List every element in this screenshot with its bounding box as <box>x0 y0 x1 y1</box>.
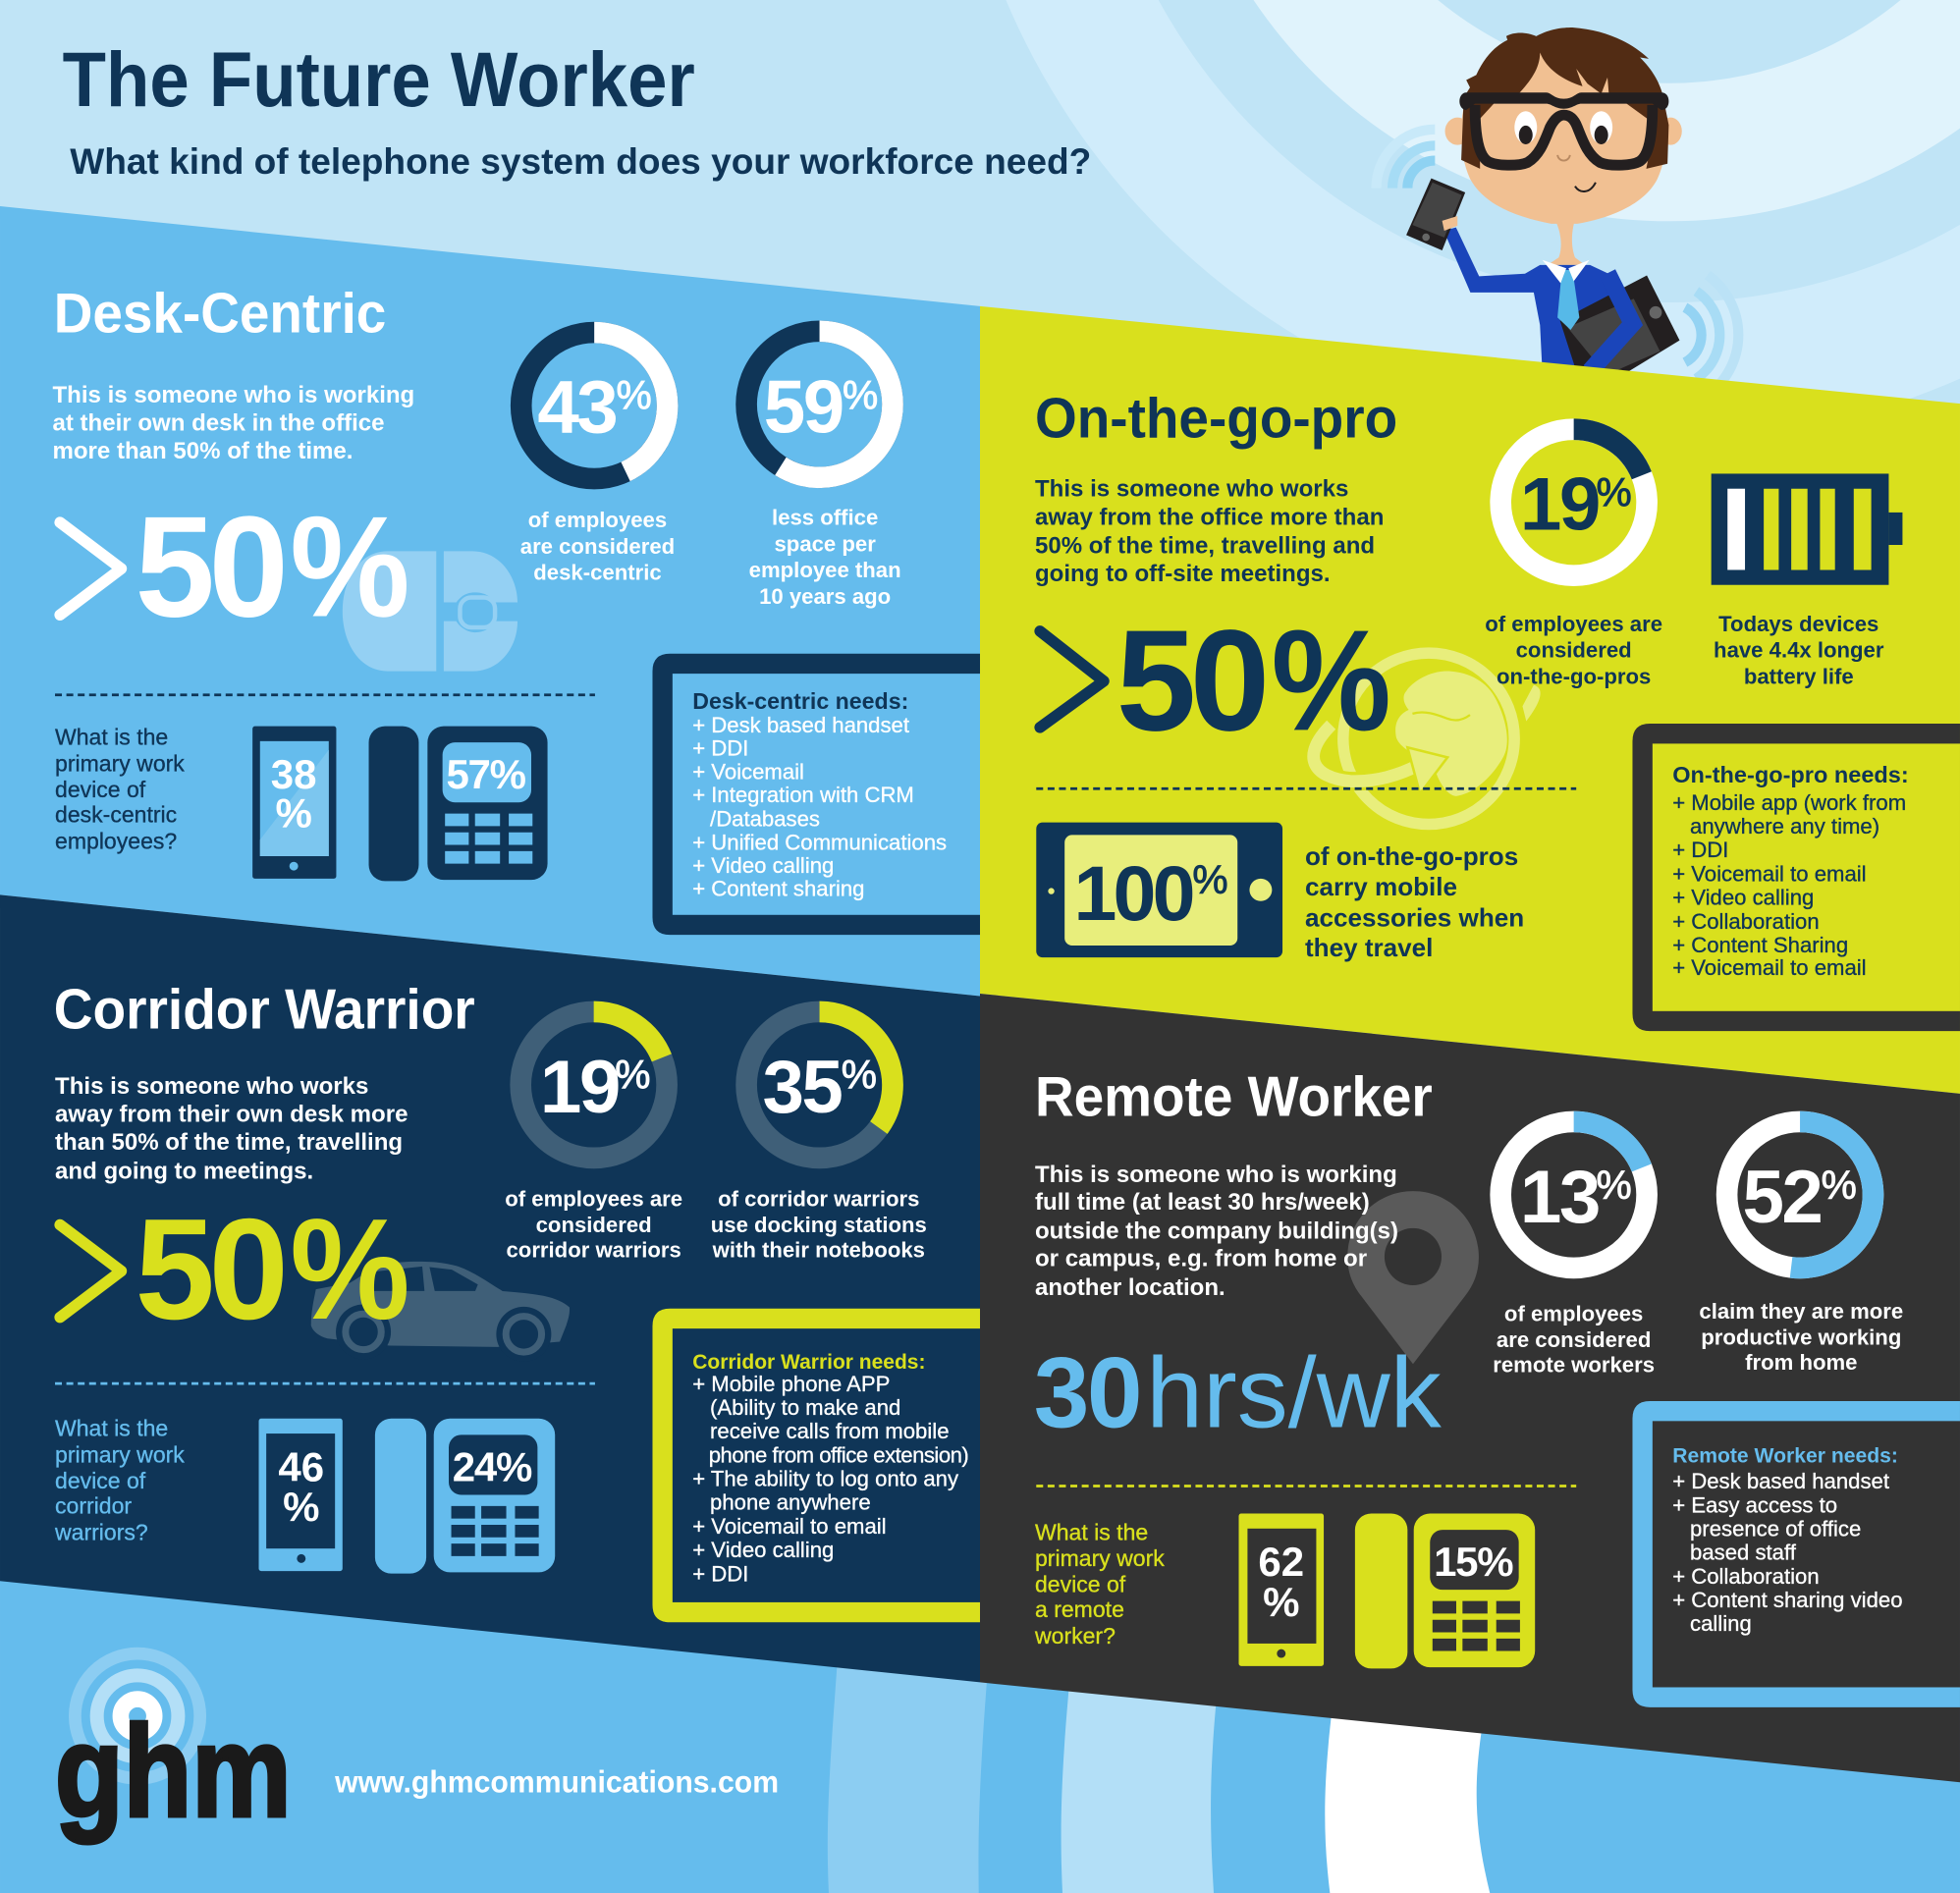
donut: 59 percent <box>746 331 893 477</box>
question: primary work <box>55 750 185 776</box>
question: desk-centric <box>55 802 177 828</box>
heading: Corridor Warrior <box>54 979 475 1042</box>
donut: 43 percent: % <box>617 372 652 417</box>
caption: of employees <box>1504 1302 1643 1326</box>
donut: 13 percent: % <box>1597 1163 1632 1208</box>
caption: are considered <box>520 534 675 559</box>
donut: 35 percent: 35 <box>763 1046 842 1129</box>
icon: landscape mobile 100 percent: 100 <box>1073 850 1193 937</box>
question: device of <box>55 1468 146 1493</box>
needs box: + Video calling <box>1672 886 1814 910</box>
heading: On-the-go-pro <box>1035 388 1397 451</box>
icon: desk phone 15 percent: 15% <box>1434 1539 1513 1585</box>
donut: 52 percent: % <box>1822 1163 1857 1208</box>
needs box: + Desk based handset <box>1672 1469 1889 1493</box>
question: employees? <box>55 828 177 853</box>
question: primary work <box>55 1441 185 1467</box>
large stat: over 50 percent: % <box>290 487 410 648</box>
donut: 13 percent <box>1500 1121 1647 1268</box>
panel: desk-centric <box>0 206 980 997</box>
description: another location. <box>1035 1274 1225 1301</box>
question: worker? <box>1034 1623 1116 1649</box>
caption: desk-centric <box>533 561 662 585</box>
character: future worker illustration <box>1377 27 1738 395</box>
caption: employee than <box>749 558 901 582</box>
description: full time (at least 30 hrs/week) <box>1035 1189 1370 1216</box>
icon: mobile 46 percent: % <box>283 1484 319 1530</box>
description: 50% of the time, travelling and <box>1035 532 1375 559</box>
donut: 19 percent: 19 <box>1520 463 1599 547</box>
large stat: over 50 percent <box>60 1189 410 1350</box>
icon: computer mouse <box>343 551 517 672</box>
donut: 19 percent: 19 <box>540 1046 619 1129</box>
needs box: presence of office <box>1690 1516 1861 1541</box>
needs box: On-the-go-pro needs: <box>1672 762 1909 787</box>
icon: car <box>311 1262 570 1362</box>
donut: 19 percent <box>1500 429 1647 575</box>
heading: Remote Worker <box>1035 1066 1433 1129</box>
description: and going to meetings. <box>55 1158 313 1184</box>
caption: of employees <box>528 508 667 532</box>
needs box: + DDI <box>1672 838 1728 862</box>
needs box: + Mobile app (work from <box>1672 790 1906 815</box>
caption: claim they are more <box>1699 1299 1903 1324</box>
donut: 19 percent: % <box>1597 470 1632 515</box>
needs box <box>1632 724 1960 1031</box>
question: What is the <box>1035 1519 1148 1544</box>
icon: desk phone 57 percent: 57% <box>446 751 526 797</box>
panel: corridor warrior <box>0 894 980 1682</box>
needs box: /Databases <box>710 806 820 831</box>
question: device of <box>55 777 146 802</box>
donut: 43 percent: 43 <box>537 365 616 449</box>
question: warriors? <box>54 1519 148 1544</box>
icon: desk phone 57 percent <box>369 727 548 881</box>
question: device of <box>1035 1572 1126 1597</box>
description: more than 50% of the time. <box>52 438 353 464</box>
donut: 52 percent: 52 <box>1742 1156 1821 1239</box>
question: corridor <box>55 1493 132 1519</box>
logo: ghm: ghm <box>55 1700 292 1845</box>
icon: desk phone 15 percent <box>1355 1514 1535 1668</box>
caption: of employees are <box>1485 612 1662 636</box>
needs box: + Unified Communications <box>692 831 947 855</box>
caption: Todays devices <box>1718 612 1878 636</box>
needs box: + Collaboration <box>1672 909 1820 934</box>
needs box: + Desk based handset <box>692 713 909 737</box>
needs box: receive calls from mobile <box>710 1419 949 1443</box>
needs box: + Content Sharing <box>1672 933 1848 957</box>
needs box: + DDI <box>692 1561 748 1586</box>
needs box: + Voicemail to email <box>692 1514 887 1539</box>
needs box: (Ability to make and <box>710 1395 900 1420</box>
needs box: + Video calling <box>692 1538 834 1562</box>
description: away from the office more than <box>1035 505 1384 531</box>
caption: space per <box>774 531 876 556</box>
needs box: Remote Worker needs: <box>1672 1444 1898 1467</box>
large stat: over 50 percent: 50 <box>135 1189 284 1350</box>
icon: mobile 46 percent: 46 <box>278 1443 324 1489</box>
icon: desk phone 24 percent: 24% <box>453 1443 532 1489</box>
large stat: 30 hrs per week: hrs/wk <box>1146 1337 1443 1449</box>
description: This is someone who works <box>55 1073 368 1100</box>
subtitle: What kind of telephone system does your workforce need? <box>70 141 1091 182</box>
caption: 10 years ago <box>759 584 891 609</box>
title: The Future Worker <box>63 36 695 123</box>
donut: 59 percent: 59 <box>764 365 843 449</box>
icon: mobile 62 percent: % <box>1263 1579 1299 1625</box>
needs box: + Video calling <box>692 853 834 878</box>
icon: mobile 62 percent: 62 <box>1258 1539 1304 1585</box>
needs box: anywhere any time) <box>1690 814 1879 838</box>
needs box: calling <box>1690 1611 1752 1636</box>
needs box <box>1632 1401 1960 1707</box>
icon: landscape mobile 100 percent: % <box>1192 857 1228 902</box>
needs box: + Voicemail to email <box>1672 955 1867 980</box>
needs box: phone anywhere <box>710 1490 871 1515</box>
needs box: Corridor Warrior needs: <box>692 1351 925 1374</box>
donut: 59 percent: % <box>843 372 878 417</box>
description: going to off-site meetings. <box>1035 561 1331 587</box>
caption: battery life <box>1744 664 1854 688</box>
description: outside the company building(s) <box>1035 1217 1398 1244</box>
caption: are considered <box>1497 1327 1651 1352</box>
question: What is the <box>55 1416 168 1441</box>
caption: carry mobile <box>1305 872 1457 901</box>
icon: mobile 38 percent: % <box>275 790 312 837</box>
needs box: + DDI <box>692 735 748 760</box>
caption: they travel <box>1305 933 1433 962</box>
icon: battery <box>1712 473 1902 585</box>
question: What is the <box>55 725 168 750</box>
caption: considered <box>1516 638 1632 663</box>
large stat: 30 hrs per week: 30 <box>1034 1337 1140 1449</box>
caption: productive working <box>1701 1325 1901 1350</box>
donut: 19 percent <box>520 1011 667 1158</box>
needs box: + Voicemail to email <box>1672 861 1867 886</box>
icon: globe <box>1314 653 1541 825</box>
icon: mobile 62 percent <box>1238 1514 1324 1666</box>
caption: on-the-go-pros <box>1497 664 1651 688</box>
heading: Desk-Centric <box>54 283 386 346</box>
needs box: + Content sharing <box>692 877 865 901</box>
large stat: over 50 percent: 50 <box>1116 600 1265 761</box>
description: This is someone who is working <box>52 382 414 408</box>
logo: ghm <box>55 1653 292 1845</box>
question: a remote <box>1035 1596 1124 1622</box>
needs box <box>652 654 980 935</box>
icon: desk phone 24 percent <box>375 1419 555 1574</box>
description: or campus, e.g. from home or <box>1035 1245 1367 1271</box>
caption: from home <box>1745 1350 1857 1375</box>
icon: mobile 46 percent <box>259 1419 343 1571</box>
description: away from their own desk more <box>55 1101 408 1127</box>
needs box: + The ability to log onto any <box>692 1467 959 1491</box>
needs box: + Mobile phone APP <box>692 1372 890 1396</box>
needs box: + Content sharing video <box>1672 1588 1903 1612</box>
description: than 50% of the time, travelling <box>55 1129 403 1156</box>
donut: 13 percent: 13 <box>1520 1156 1599 1239</box>
question: primary work <box>1035 1545 1165 1571</box>
needs box: + Integration with CRM <box>692 783 914 807</box>
needs box: phone from office extension) <box>709 1442 968 1467</box>
caption: use docking stations <box>711 1213 927 1237</box>
icon: mobile 38 percent <box>252 727 336 879</box>
caption: with their notebooks <box>712 1238 925 1263</box>
needs box: + Easy access to <box>1672 1492 1837 1517</box>
caption: corridor warriors <box>507 1238 681 1263</box>
description: This is someone who works <box>1035 475 1348 502</box>
needs box: + Voicemail <box>692 760 804 784</box>
needs box: Desk-centric needs: <box>692 688 908 714</box>
donut: 35 percent <box>746 1011 893 1158</box>
donut: 43 percent <box>521 333 668 479</box>
large stat: over 50 percent: 50 <box>135 487 284 648</box>
needs box <box>652 1309 980 1622</box>
large stat: over 50 percent <box>1040 600 1391 761</box>
icon: mobile 38 percent: 38 <box>271 751 317 797</box>
caption: less office <box>772 506 878 530</box>
description: at their own desk in the office <box>52 410 385 437</box>
caption: considered <box>536 1213 652 1237</box>
caption: remote workers <box>1493 1353 1655 1378</box>
caption: accessories when <box>1305 902 1524 932</box>
large stat: over 50 percent: % <box>1272 600 1391 761</box>
large stat: over 50 percent: % <box>290 1189 410 1350</box>
needs box: + Collaboration <box>1672 1564 1820 1589</box>
caption: of corridor warriors <box>718 1186 919 1211</box>
donut: 35 percent: % <box>842 1053 877 1098</box>
icon: landscape mobile 100 percent <box>1036 823 1282 957</box>
needs box: based staff <box>1690 1541 1797 1565</box>
caption: have 4.4x longer <box>1714 638 1884 663</box>
large stat: over 50 percent <box>60 487 410 648</box>
donut: 52 percent <box>1727 1121 1874 1268</box>
caption: of employees are <box>505 1186 682 1211</box>
icon: location pin <box>1347 1191 1479 1364</box>
bottom blue band with curved stripes <box>0 1500 1960 1893</box>
description: This is someone who is working <box>1035 1162 1397 1188</box>
panel: remote worker <box>980 994 1960 1782</box>
panel: on-the-go-pro <box>980 306 1960 1094</box>
caption: of on-the-go-pros <box>1305 841 1518 871</box>
donut: 19 percent: % <box>615 1053 651 1098</box>
website url: www.ghmcommunications.com <box>334 1763 779 1799</box>
